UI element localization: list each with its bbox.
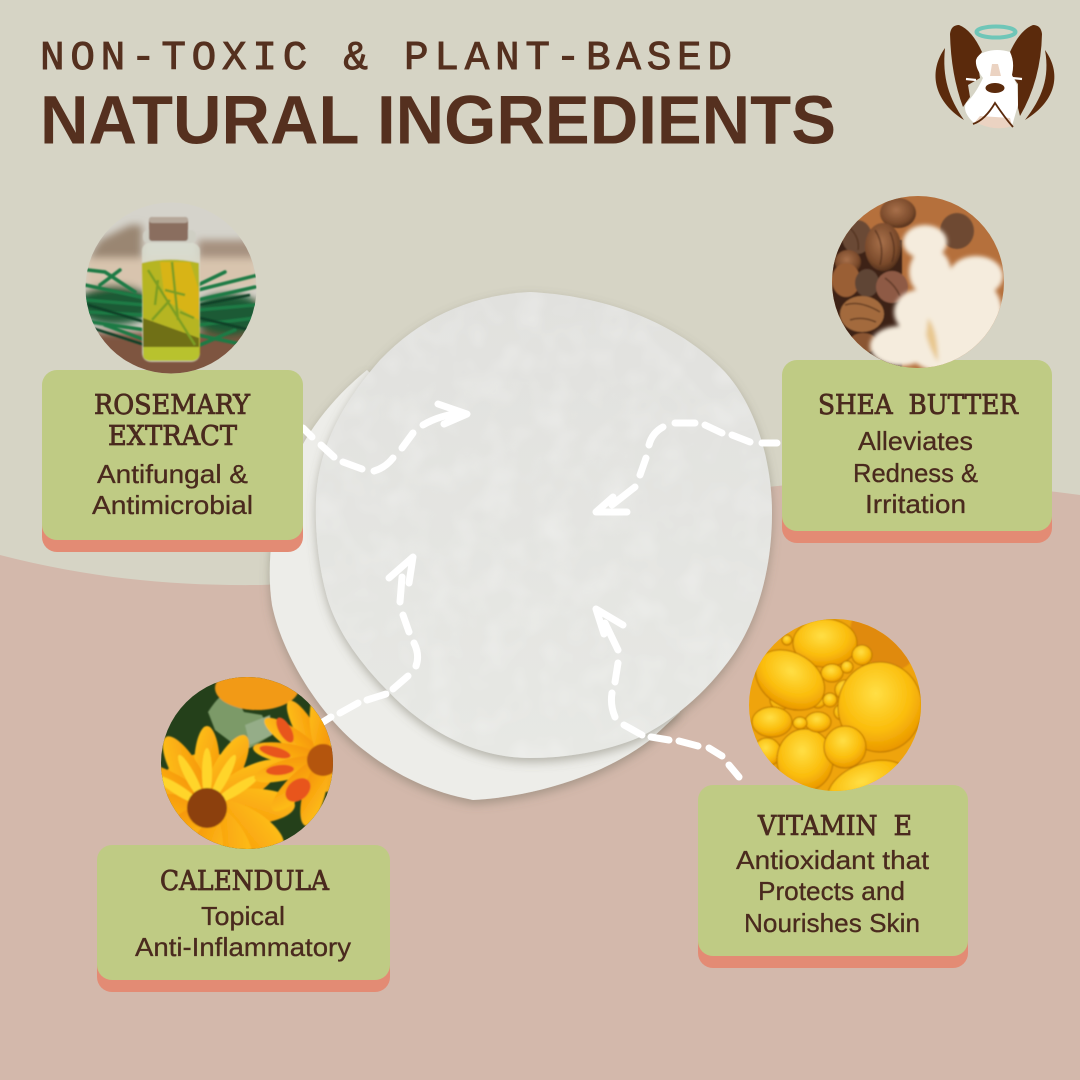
card face: rosemary xyxy=(42,370,303,540)
panel: vitamin e xyxy=(698,598,968,968)
card base: calendula xyxy=(97,857,390,992)
cotton pad: back xyxy=(270,370,680,800)
text: vitamin e benefits: Nourishes Skin xyxy=(744,908,920,938)
arrow: shea butter to pad xyxy=(596,423,777,512)
heading: rosemary extract: ROSEMARY xyxy=(94,390,251,421)
text: calendula benefits: Anti-Inflammatory xyxy=(135,932,351,962)
text: shea butter benefits xyxy=(853,426,978,519)
panel: shea butter xyxy=(782,196,1052,543)
title: NATURAL INGREDIENTS xyxy=(40,82,836,158)
card face: shea butter xyxy=(782,360,1052,531)
card base: vitamin e xyxy=(698,797,968,968)
photo: shea nuts and butter xyxy=(832,196,1004,372)
text: rosemary benefits: Antimicrobial xyxy=(92,490,253,520)
heading: rosemary extract xyxy=(94,390,251,452)
text: vitamin e benefits xyxy=(736,845,930,938)
text: vitamin e benefits: Protects and xyxy=(758,876,905,906)
logo: angel bulldog xyxy=(936,25,1054,128)
card face: vitamin e xyxy=(698,785,968,956)
cotton pad: front xyxy=(310,285,780,765)
heading: shea butter: SHEA BUTTER xyxy=(818,390,1019,421)
text: calendula benefits: Topical xyxy=(201,901,285,931)
photo: vitamin e oil bubbles xyxy=(749,619,921,791)
heading: calendula: CALENDULA xyxy=(160,866,329,897)
card base: shea butter xyxy=(782,372,1052,543)
arrow: rosemary to pad xyxy=(303,404,467,471)
heading: vitamin e: VITAMIN E xyxy=(757,811,912,842)
text: calendula benefits xyxy=(135,901,351,962)
panel: calendula xyxy=(97,666,390,992)
photo: rosemary oil bottle xyxy=(86,216,256,374)
text: vitamin e benefits: Antioxidant that xyxy=(736,845,930,875)
subtitle: NON-TOXIC & PLANT-BASED xyxy=(40,36,732,82)
background: pink wave xyxy=(0,482,1080,1080)
text: shea butter benefits: Irritation xyxy=(865,489,966,519)
heading: rosemary extract: EXTRACT xyxy=(108,421,237,452)
panel: rosemary extract xyxy=(42,202,303,552)
text: rosemary benefits xyxy=(92,459,253,520)
photo: calendula flowers xyxy=(161,677,333,849)
text: shea butter benefits: Redness & xyxy=(853,458,978,488)
text: rosemary benefits: Antifungal & xyxy=(97,459,248,489)
card base: rosemary xyxy=(42,382,303,552)
arrow: vitamin e to pad xyxy=(596,609,739,777)
text: shea butter benefits: Alleviates xyxy=(858,426,973,456)
card face: calendula xyxy=(97,845,390,980)
arrow: calendula to pad xyxy=(323,557,418,722)
